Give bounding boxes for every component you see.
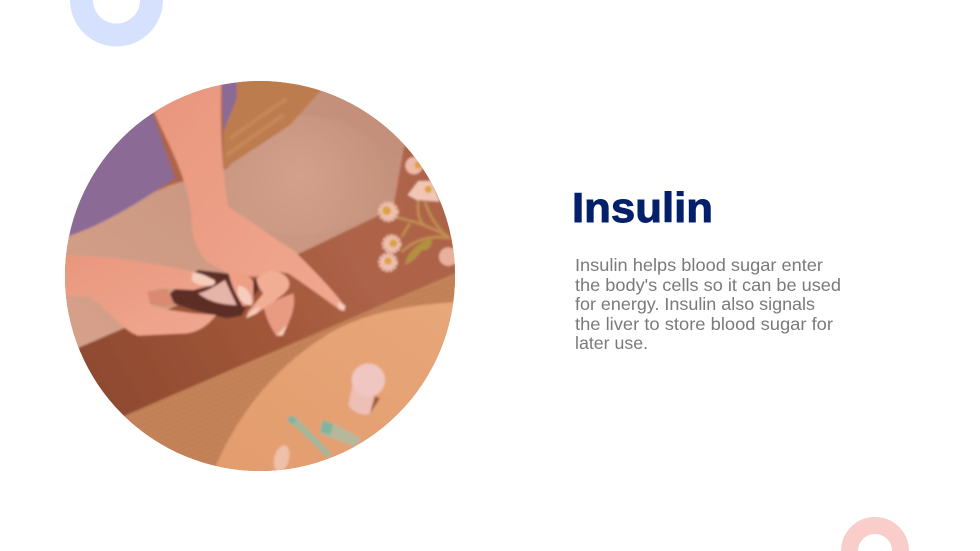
body text: for energy. Insulin also signals <box>575 294 815 314</box>
thumb of upper hand <box>228 272 253 307</box>
ring finger <box>263 293 294 336</box>
lower hand <box>65 254 217 338</box>
body text: the liver to store blood sugar for <box>575 314 833 334</box>
shadow under bottle <box>370 395 380 413</box>
syringes <box>292 418 332 458</box>
stems <box>395 200 450 252</box>
rug <box>124 273 455 466</box>
body text: later use. <box>575 333 648 353</box>
body text <box>575 255 841 353</box>
bottle <box>348 382 375 415</box>
nails <box>192 272 216 286</box>
palm hollow <box>147 288 175 307</box>
body text: Insulin helps blood sugar enter <box>575 255 823 275</box>
powder <box>272 444 291 470</box>
middle finger <box>246 270 289 318</box>
purple towel <box>69 112 176 237</box>
couch <box>66 90 406 349</box>
floor <box>78 146 455 416</box>
meter <box>170 270 258 318</box>
body text: the body's cells so it can be used <box>575 275 841 295</box>
decorative ring: top left <box>82 0 152 35</box>
flowers <box>380 204 396 220</box>
orange cloth <box>222 81 322 168</box>
circular photo: hands using a glucose meter <box>65 81 455 471</box>
decorative ring: bottom right <box>850 526 900 551</box>
heading: Insulin <box>572 184 713 231</box>
table <box>215 302 453 471</box>
arm and upper hand <box>148 68 345 311</box>
